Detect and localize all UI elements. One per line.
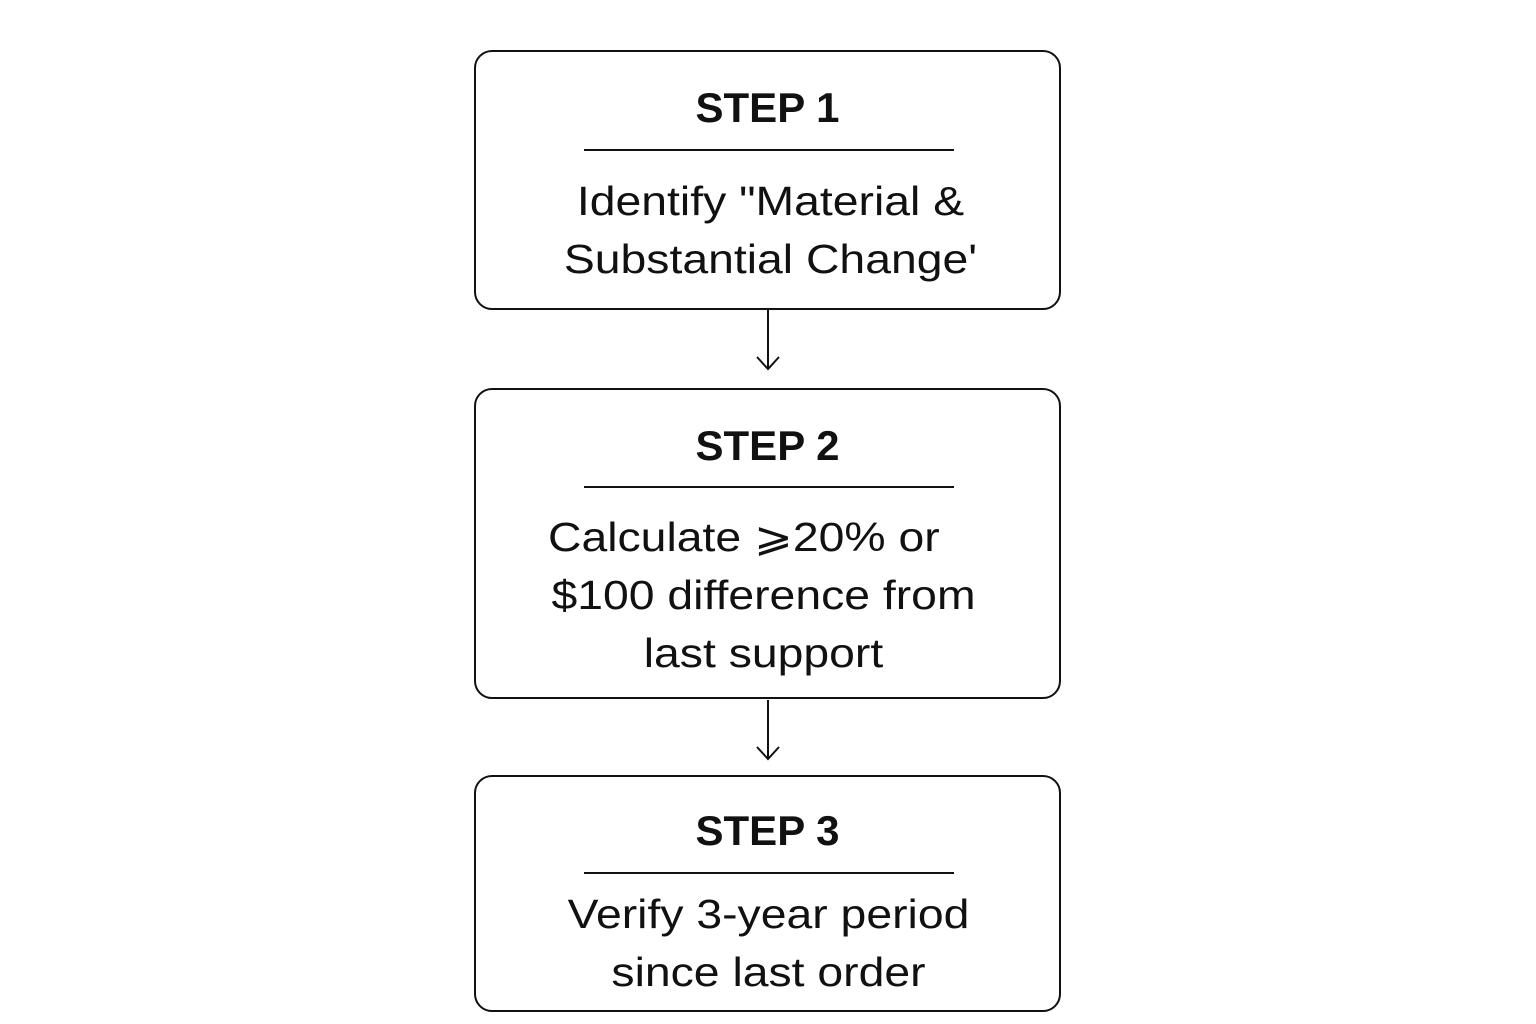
arrow: 1 to 2 [756,310,780,370]
heading: step 2: STEP 2 [696,422,839,469]
text: step 1 [564,178,977,282]
text: step 3: since last order [611,949,926,995]
text: step 2 [548,514,976,676]
heading: step 1: STEP 1 [696,84,839,131]
text: step 2: Calculate ⩾20% or [548,514,940,560]
text: step 1: Substantial Change' [564,236,977,282]
text: step 2: $100 difference from [551,572,976,618]
panel: step 2 [474,388,1061,699]
text: step 2: last support [644,630,883,676]
panel: step 1 [474,50,1061,310]
text: step 1: Identify "Material & [577,178,964,224]
text: step 3: Verify 3-year period [568,891,969,937]
panel: step 3 [474,775,1061,1012]
heading: step 3: STEP 3 [696,807,839,854]
text: step 3 [568,891,969,995]
arrow: 2 to 3 [756,700,780,760]
